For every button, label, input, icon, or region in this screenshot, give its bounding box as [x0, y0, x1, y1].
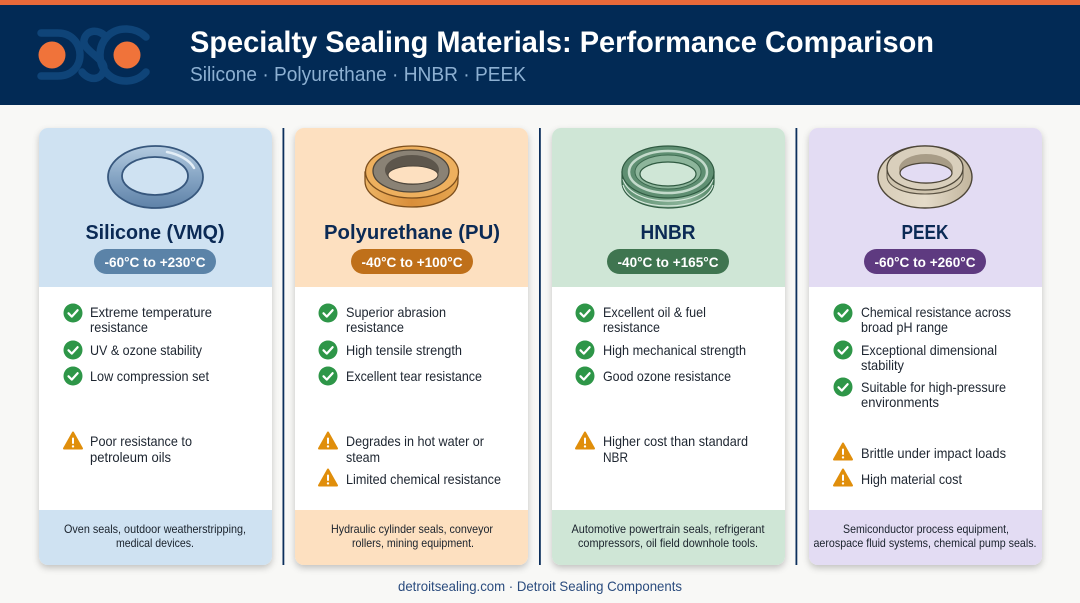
- applications: [572, 522, 765, 550]
- applications: aerospace fluid systems, chemical pump seals.: [814, 536, 1036, 550]
- icon: HNBR ridged seal: [622, 146, 714, 208]
- advantages: Low compression set: [90, 368, 209, 384]
- divider: [282, 128, 284, 565]
- advantages: Chemical resistance across: [861, 304, 1011, 320]
- temperature badge: [94, 249, 216, 274]
- heading: Silicone (VMQ): [86, 222, 224, 244]
- advantages: stability: [861, 357, 904, 373]
- temperature badge: -40°C to +165°C: [618, 254, 718, 270]
- panel: Polyurethane: [295, 128, 528, 565]
- limitations: Higher cost than standard: [603, 433, 748, 449]
- advantages: environments: [861, 394, 939, 410]
- limitations: Degrades in hot water or: [346, 433, 484, 449]
- advantages: [318, 304, 482, 386]
- advantages: [834, 304, 1011, 410]
- footer credit: detroitsealing.com · Detroit Sealing Components: [398, 578, 682, 594]
- subtitle: Silicone · Polyurethane · HNBR · PEEK: [190, 64, 527, 86]
- applications: Automotive powertrain seals, refrigerant: [572, 522, 765, 536]
- advantages: High tensile strength: [346, 342, 462, 358]
- temperature badge: -60°C to +260°C: [874, 254, 976, 270]
- icon: silicone O-ring: [108, 146, 203, 208]
- advantages: resistance: [603, 319, 660, 335]
- temperature badge: [607, 249, 729, 274]
- advantages: Exceptional dimensional: [861, 342, 997, 358]
- limitations: Poor resistance to: [90, 433, 192, 449]
- divider: [539, 128, 541, 565]
- temperature badge: -40°C to +100°C: [362, 254, 462, 270]
- limitations: Limited chemical resistance: [346, 471, 501, 487]
- panel: PEEK: [809, 128, 1042, 565]
- applications: Hydraulic cylinder seals, conveyor: [331, 522, 493, 536]
- applications: [814, 522, 1036, 550]
- applications: Semiconductor process equipment,: [843, 522, 1009, 536]
- icon: polyurethane washer: [365, 146, 458, 207]
- advantages: UV & ozone stability: [90, 342, 202, 358]
- advantages: Good ozone resistance: [603, 368, 731, 384]
- temperature badge: [864, 249, 986, 274]
- advantages: Excellent oil & fuel: [603, 304, 706, 320]
- applications: [331, 522, 493, 550]
- limitations: [64, 432, 192, 465]
- advantages: [64, 304, 212, 386]
- limitations: High material cost: [861, 471, 962, 487]
- limitations: [834, 444, 1006, 487]
- limitations: [319, 432, 501, 487]
- advantages: [576, 304, 746, 386]
- advantages: resistance: [90, 319, 148, 335]
- applications: [64, 522, 246, 550]
- panel: Silicone: [39, 128, 272, 565]
- applications: medical devices.: [116, 536, 194, 550]
- title: Specialty Sealing Materials: Performance Comparison: [190, 26, 934, 59]
- advantages: Suitable for high-pressure: [861, 379, 1006, 395]
- advantages: Superior abrasion: [346, 304, 446, 320]
- limitations: [576, 432, 748, 465]
- limitations: NBR: [603, 449, 628, 465]
- advantages: High mechanical strength: [603, 342, 746, 358]
- advantages: Extreme temperature: [90, 304, 212, 320]
- icon: PEEK flanged ring: [878, 146, 972, 208]
- header banner: [0, 0, 1080, 105]
- heading: PEEK: [902, 222, 949, 244]
- divider: [796, 128, 797, 565]
- temperature badge: -60°C to +230°C: [104, 254, 206, 270]
- logo: DSC mark: [38, 29, 146, 81]
- panel: HNBR: [552, 128, 785, 565]
- heading: Polyurethane (PU): [324, 222, 500, 244]
- heading: HNBR: [640, 222, 696, 244]
- advantages: Excellent tear resistance: [346, 368, 482, 384]
- applications: Oven seals, outdoor weatherstripping,: [64, 522, 246, 536]
- applications: rollers, mining equipment.: [352, 536, 474, 550]
- limitations: steam: [346, 449, 380, 465]
- limitations: Brittle under impact loads: [861, 445, 1006, 461]
- applications: compressors, oil field downhole tools.: [578, 536, 758, 550]
- advantages: broad pH range: [861, 319, 948, 335]
- limitations: petroleum oils: [90, 449, 171, 465]
- temperature badge: [351, 249, 473, 274]
- advantages: resistance: [346, 319, 404, 335]
